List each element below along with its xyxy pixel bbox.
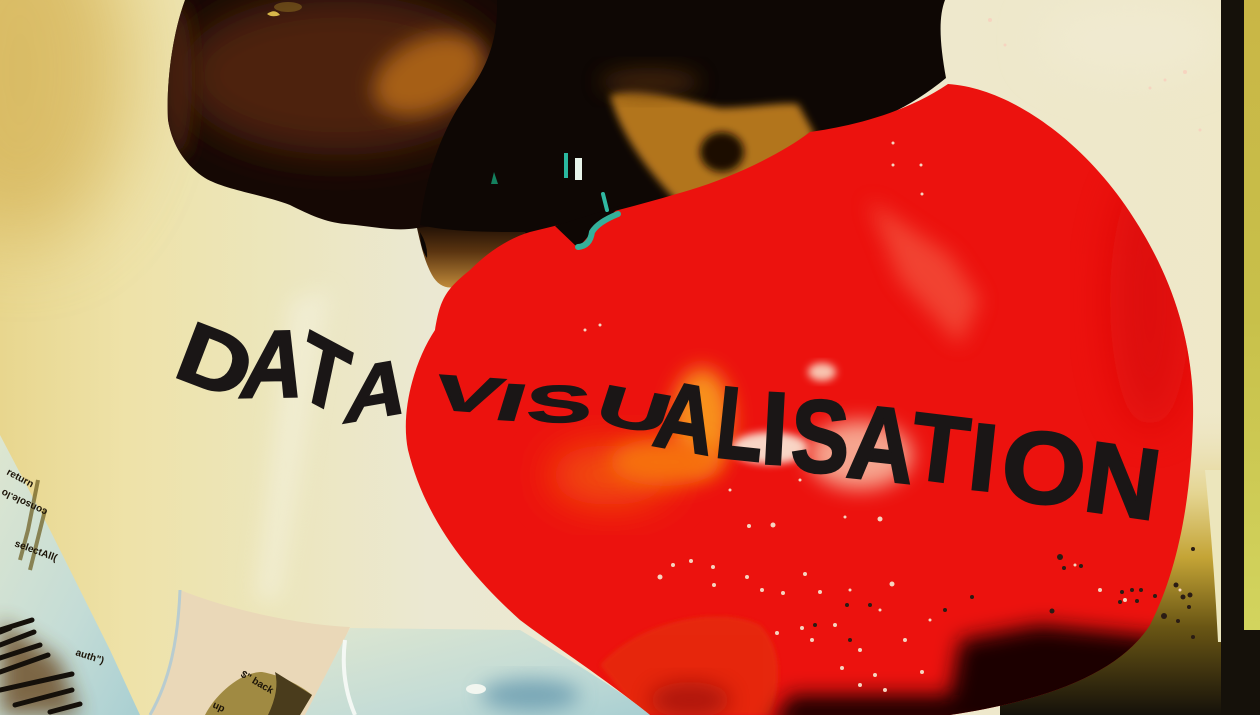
title: DATA: A	[233, 311, 317, 418]
water droplets	[584, 18, 1202, 692]
title: VISUALISATION: A	[843, 382, 921, 506]
title: VISUALISATION: S	[789, 379, 851, 496]
head silhouette	[168, 0, 526, 288]
right window frame and lime strip	[1000, 0, 1260, 715]
title: VISUALISATION: U	[589, 373, 679, 446]
code printout text	[0, 467, 275, 715]
title: VISUALISATION: N	[1078, 422, 1167, 542]
title: DATA: D	[165, 303, 266, 418]
plastic sheets lower left	[0, 435, 650, 715]
code printout text: selectAll(	[13, 538, 59, 564]
code printout dark stripes	[0, 620, 80, 712]
shadow wedge and teal reflection	[491, 153, 622, 248]
title: VISUALISATION: O	[997, 408, 1091, 529]
code printout text: console.lo	[0, 486, 49, 517]
code printout text: return	[5, 467, 35, 490]
title: VISUALISATION: I	[489, 373, 534, 432]
title: VISUALISATION: A	[647, 361, 724, 475]
title: DATA: A	[338, 340, 417, 441]
code printout text: $" back	[238, 669, 275, 697]
title: VISUALISATION: I	[964, 403, 1003, 512]
red balloon shape	[390, 70, 1210, 715]
title: DATA	[165, 303, 417, 441]
title: VISUALISATION: L	[711, 366, 770, 484]
title: VISUALISATION: T	[905, 392, 975, 505]
code printout text: auth")	[74, 647, 105, 667]
title: VISUALISATION: I	[759, 370, 791, 486]
title: VISUALISATION: S	[527, 376, 591, 433]
dark droplet clusters	[813, 547, 1195, 642]
title: DATA: T	[292, 310, 358, 437]
hair and shadow	[420, 0, 946, 240]
title: VISUALISATION	[425, 361, 1167, 542]
title: VISUALISATION: V	[425, 364, 510, 424]
code printout text: up	[211, 700, 226, 715]
